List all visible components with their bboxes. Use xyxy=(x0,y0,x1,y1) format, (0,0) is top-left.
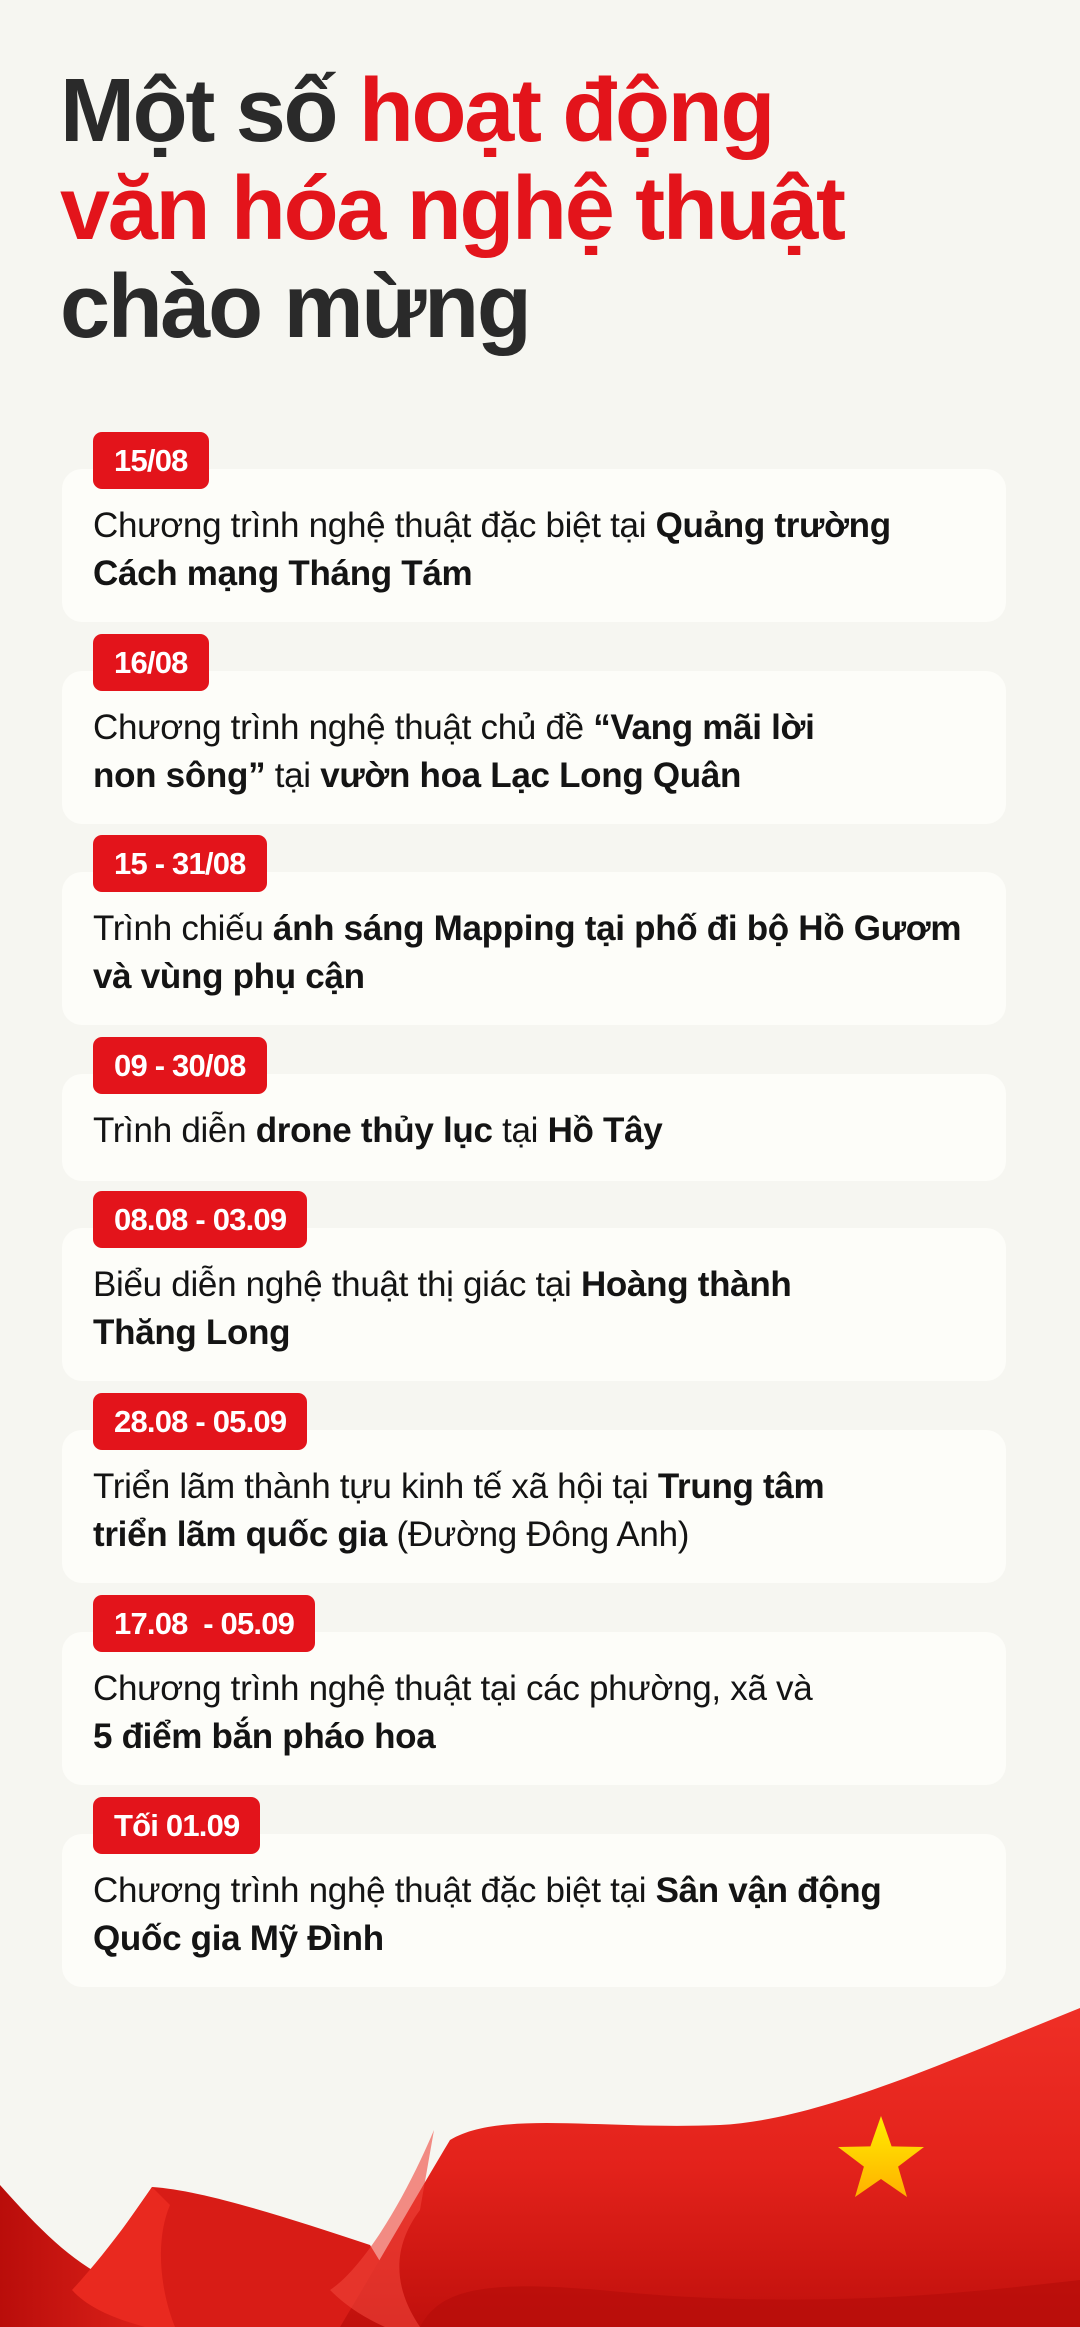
card 2 xyxy=(62,671,1006,824)
card 5 xyxy=(62,1228,1006,1381)
text 1: Chương trình nghệ thuật đặc biệt tại Quảng trường xyxy=(93,506,891,545)
badge 4 xyxy=(93,1037,267,1094)
text 3 xyxy=(93,909,961,996)
text 6: triển lãm quốc gia (Đường Đông Anh) xyxy=(93,1515,689,1554)
text 1 xyxy=(93,506,891,593)
back left ribbon xyxy=(0,2185,420,2327)
card 4 xyxy=(62,1074,1006,1181)
card 7 xyxy=(62,1632,1006,1785)
text 4: Trình diễn drone thủy lục tại Hồ Tây xyxy=(93,1111,662,1150)
badge 7 xyxy=(93,1595,315,1652)
text 7: 5 điểm bắn pháo hoa xyxy=(93,1717,435,1756)
text 2: Chương trình nghệ thuật chủ đề “Vang mãi lời xyxy=(93,708,815,747)
card 1 xyxy=(62,469,1006,622)
text 7: Chương trình nghệ thuật tại các phường, xã và xyxy=(93,1669,812,1708)
text 2: non sông” tại vườn hoa Lạc Long Quân xyxy=(93,756,741,795)
badge 8 xyxy=(93,1797,260,1854)
card 6 xyxy=(62,1430,1006,1583)
title xyxy=(60,61,845,357)
card 8 xyxy=(62,1834,1006,1987)
text 2 xyxy=(93,708,815,795)
text 5: Biểu diễn nghệ thuật thị giác tại Hoàng thành xyxy=(93,1265,792,1304)
badge 8: Tối 01.09 xyxy=(114,1808,239,1843)
text 8: Quốc gia Mỹ Đình xyxy=(93,1919,384,1958)
badge 3: 15 - 31/08 xyxy=(114,846,246,881)
badge 3 xyxy=(93,835,267,892)
badge 2 xyxy=(93,634,209,691)
text 6: Triển lãm thành tựu kinh tế xã hội tại Trung tâm xyxy=(93,1467,824,1506)
badge 5: 08.08 - 03.09 xyxy=(114,1202,286,1237)
text 5 xyxy=(93,1265,792,1352)
title: văn hóa nghệ thuật xyxy=(60,159,844,259)
badge 7: 17.08 - 05.09 xyxy=(114,1606,294,1641)
text 5: Thăng Long xyxy=(93,1313,290,1352)
badge 5 xyxy=(93,1191,307,1248)
badge 6 xyxy=(93,1393,307,1450)
text 3: và vùng phụ cận xyxy=(93,957,365,996)
text 7 xyxy=(93,1669,813,1756)
main flag xyxy=(330,2008,1080,2327)
text 6 xyxy=(93,1467,824,1554)
title: chào mừng xyxy=(60,257,530,357)
text 1: Cách mạng Tháng Tám xyxy=(93,554,472,593)
badge 1 xyxy=(93,432,209,489)
icon: star xyxy=(838,2116,924,2197)
flag ribbon xyxy=(0,2008,1080,2327)
badge 2: 16/08 xyxy=(114,645,188,680)
text 8 xyxy=(93,1871,881,1958)
title: Một số hoạt động xyxy=(60,61,773,161)
badge 1: 15/08 xyxy=(114,443,188,478)
text 8: Chương trình nghệ thuật đặc biệt tại Sân vận động xyxy=(93,1871,881,1910)
badge 6: 28.08 - 05.09 xyxy=(114,1404,286,1439)
text 3: Trình chiếu ánh sáng Mapping tại phố đi bộ Hồ Gươm xyxy=(93,909,961,948)
badge 4: 09 - 30/08 xyxy=(114,1048,246,1083)
card 3 xyxy=(62,872,1006,1025)
